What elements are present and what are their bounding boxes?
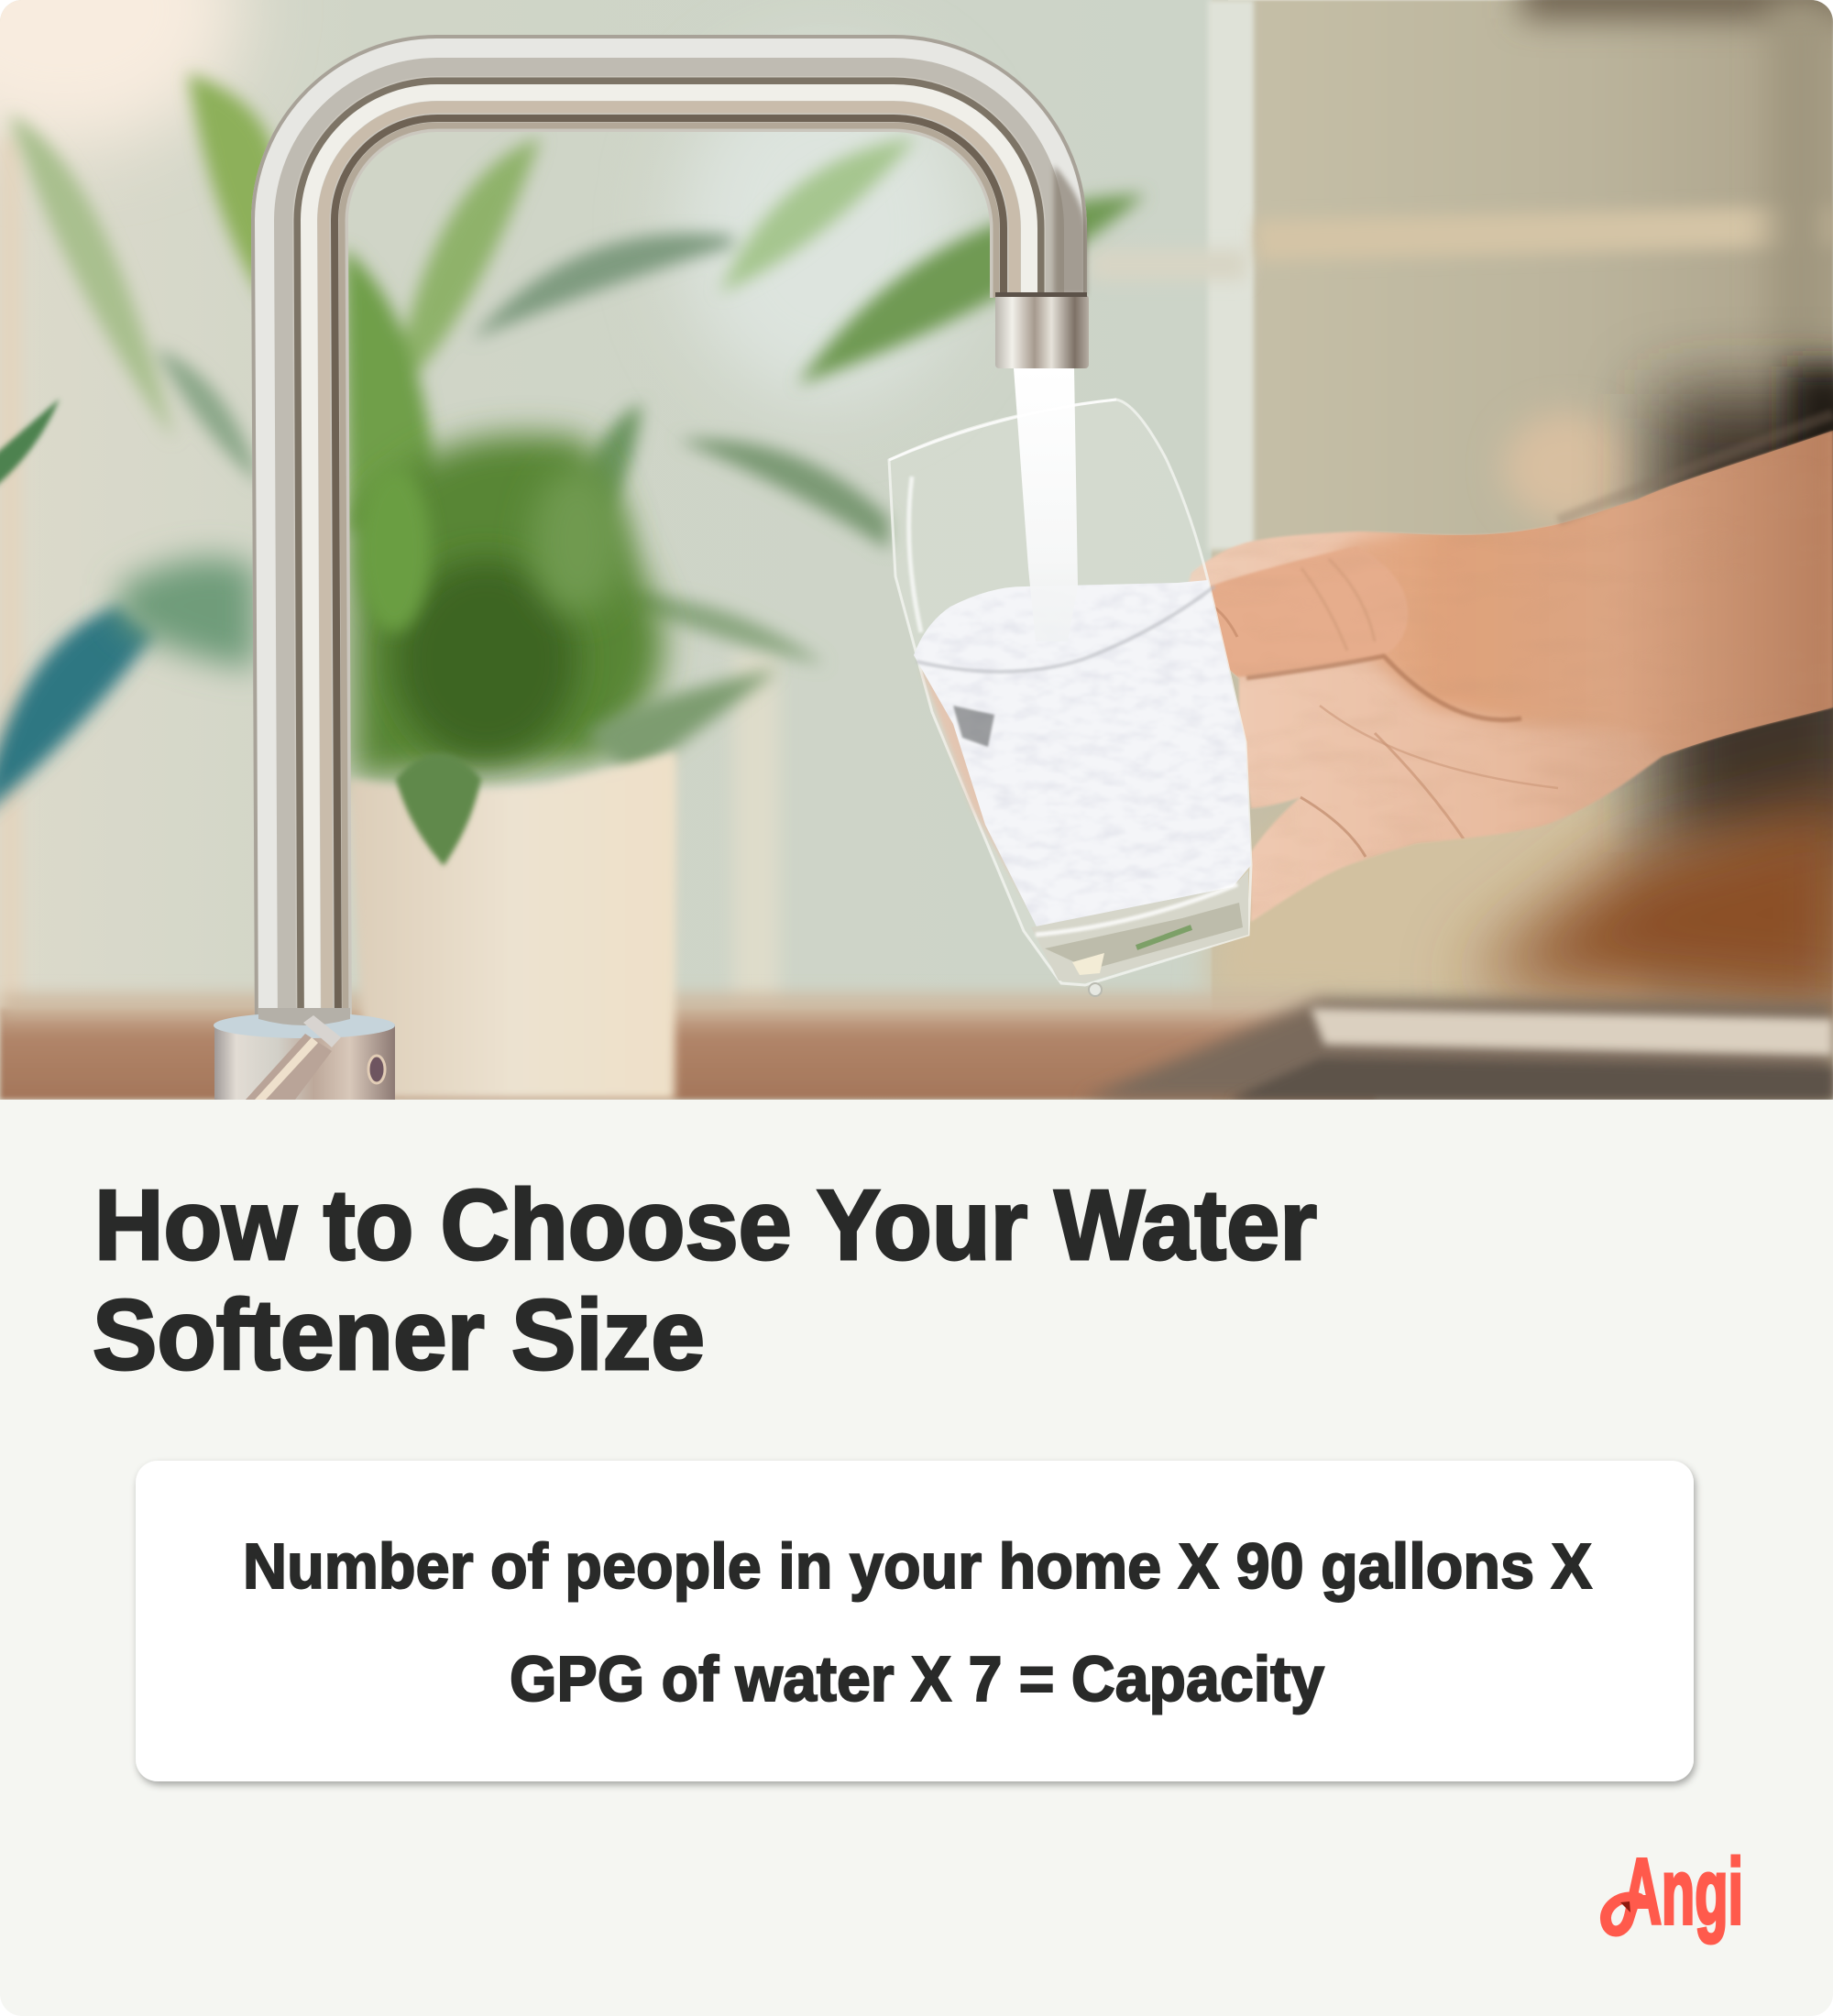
teal leaf at left <box>0 605 156 816</box>
back of hand shading <box>1283 412 1833 770</box>
glass highlight <box>909 477 921 632</box>
photo: faucet filling a glass held by a hand <box>0 0 1833 1100</box>
faucet pipe <box>254 38 1084 1035</box>
title: How to Choose Your Water <box>94 1169 1317 1281</box>
glass base <box>1031 871 1248 982</box>
glass rim <box>889 400 1116 460</box>
logo: Angi <box>1606 1841 1743 1944</box>
plant pot <box>348 751 676 1100</box>
glass body <box>889 400 1251 985</box>
formula card <box>136 1461 1694 1781</box>
green leaf over pot <box>396 753 481 866</box>
logo: Angi: Angi <box>1622 1841 1743 1944</box>
lever handle <box>246 1034 332 1100</box>
panel: page background <box>0 1100 1833 2016</box>
blurred kitchen background <box>0 0 1833 1100</box>
water surface swirl <box>916 586 1214 672</box>
faucet aerator tip <box>995 292 1089 368</box>
formula text: GPG of water X 7 = Capacity <box>510 1643 1324 1715</box>
set-screw hole <box>368 1056 385 1083</box>
shaded outer side of the spout <box>1054 165 1087 295</box>
formula text <box>243 1530 1592 1715</box>
title: Softener Size <box>93 1279 705 1391</box>
hand and forearm <box>1173 412 1833 926</box>
faucet base <box>214 1008 395 1100</box>
dark reflection <box>953 706 994 747</box>
title <box>93 1169 1317 1391</box>
water stream <box>1014 368 1078 641</box>
faucet <box>214 38 1089 1100</box>
water drop <box>1089 983 1102 996</box>
swirling water <box>914 580 1251 926</box>
drinking glass with swirling water <box>889 368 1251 996</box>
back of hand, thumb and creases <box>1173 412 1833 926</box>
formula text: Number of people in your home X 90 gallons X <box>243 1530 1592 1602</box>
thumb <box>1180 546 1408 676</box>
arm hair <box>1558 414 1833 520</box>
dense central foliage <box>353 434 779 779</box>
pink reflection at left of glass <box>921 669 1036 916</box>
plant with blurred green leaves <box>0 73 1146 816</box>
